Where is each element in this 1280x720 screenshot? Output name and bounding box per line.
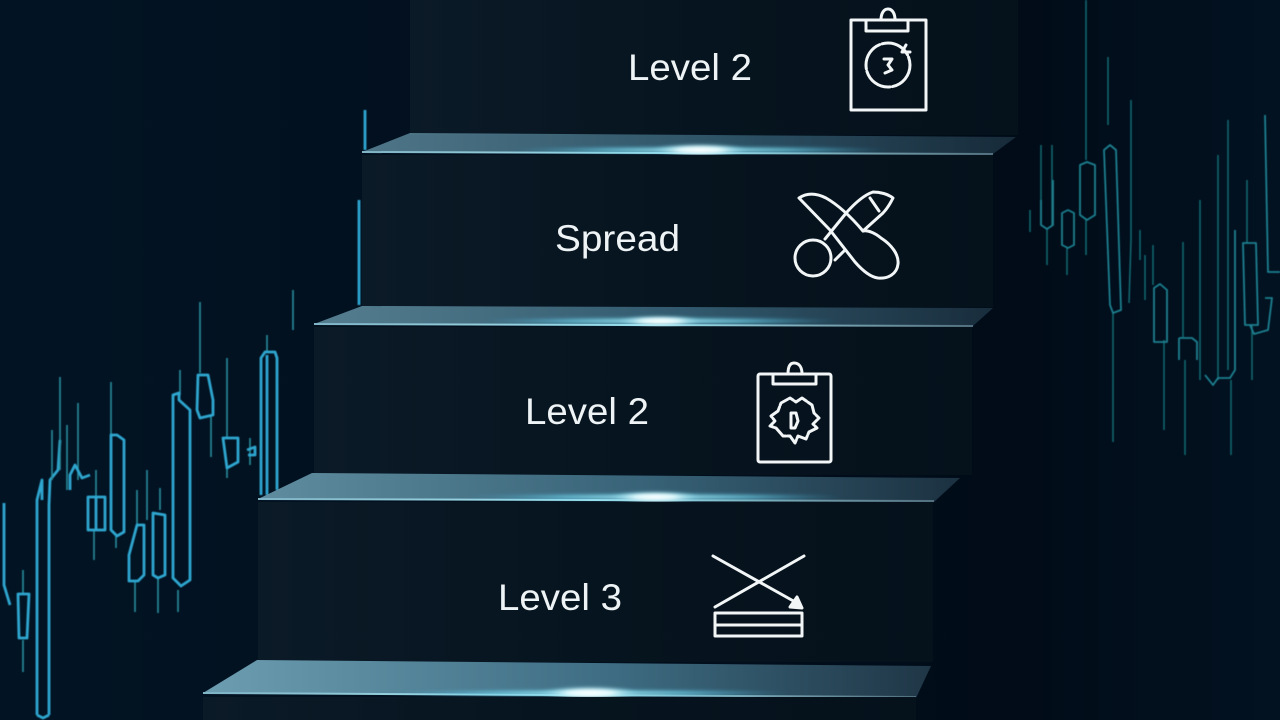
step 1: Level 2 xyxy=(410,0,1018,135)
candlestick chart: right xyxy=(1030,0,1280,455)
icon: clipboard with burst xyxy=(758,363,831,462)
tread xyxy=(314,306,993,327)
step face xyxy=(410,0,1018,135)
label: Spread xyxy=(555,218,680,259)
step 2: Spread xyxy=(362,133,1016,307)
step 5: bottom xyxy=(203,660,931,720)
step face xyxy=(203,697,916,720)
label: Level 2 xyxy=(525,391,649,432)
tread xyxy=(203,660,931,700)
step 4: Level 3 xyxy=(258,473,960,662)
step face xyxy=(362,155,993,307)
tread xyxy=(362,133,1016,156)
icon: crossed lines over stacked bars xyxy=(713,556,804,636)
step 3: Level 2 xyxy=(314,306,993,475)
step face xyxy=(314,327,972,475)
icon: scissors xyxy=(795,192,898,278)
label: Level 2 xyxy=(628,47,752,88)
step face xyxy=(258,502,933,662)
label: Level 3 xyxy=(498,577,622,618)
tread xyxy=(258,473,960,503)
candlestick chart: left xyxy=(4,110,365,718)
icon: clipboard with timer xyxy=(851,9,926,110)
